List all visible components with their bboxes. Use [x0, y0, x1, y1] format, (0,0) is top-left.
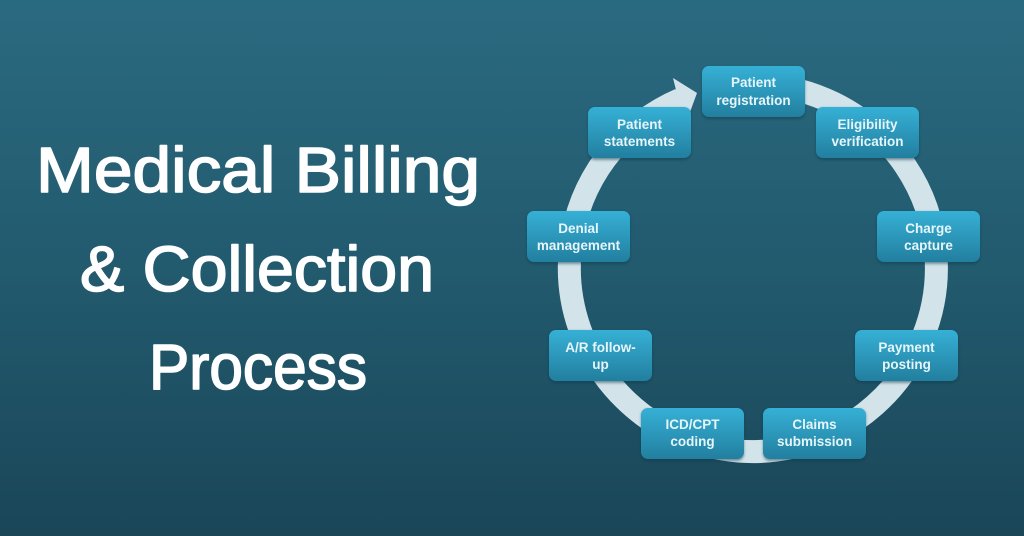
title: Process	[149, 331, 367, 403]
box: Charge capture: capture	[904, 238, 953, 253]
box: Eligibility verification: verification	[831, 134, 904, 149]
box: Claims submission	[763, 408, 866, 461]
box: A/R follow-up	[549, 330, 652, 383]
box: Patient statements: Patient	[617, 117, 663, 132]
box: A/R follow-up: up	[592, 357, 609, 372]
box: Claims submission: Claims	[792, 417, 837, 432]
box: Patient registration: registration	[716, 93, 791, 108]
box: Patient registration: Patient	[731, 75, 777, 90]
circular arrow	[569, 78, 936, 451]
box: Patient statements	[588, 107, 691, 160]
box: Payment posting	[855, 330, 958, 383]
title: Medical Billing	[36, 134, 480, 206]
box: Eligibility verification: Eligibility	[837, 117, 898, 132]
box: Patient registration	[702, 66, 805, 119]
box: ICD/CPT coding: coding	[670, 434, 715, 449]
cycle diagram	[527, 66, 980, 461]
box: Claims submission: submission	[777, 434, 852, 449]
box: ICD/CPT coding	[641, 408, 744, 461]
box: Denial management: Denial	[558, 221, 599, 236]
box: Payment posting: Payment	[878, 340, 935, 355]
box: Payment posting: posting	[882, 357, 931, 372]
box: Eligibility verification	[816, 107, 919, 160]
box: A/R follow-up: A/R follow-	[565, 340, 636, 355]
box: Charge capture: Charge	[905, 221, 952, 236]
box: Patient statements: statements	[604, 134, 675, 149]
box: Denial management	[527, 211, 630, 264]
title: & Collection	[80, 233, 434, 305]
title	[36, 134, 480, 403]
box: Charge capture	[877, 211, 980, 264]
box: Denial management: management	[537, 238, 621, 253]
box: ICD/CPT coding: ICD/CPT	[666, 417, 720, 432]
